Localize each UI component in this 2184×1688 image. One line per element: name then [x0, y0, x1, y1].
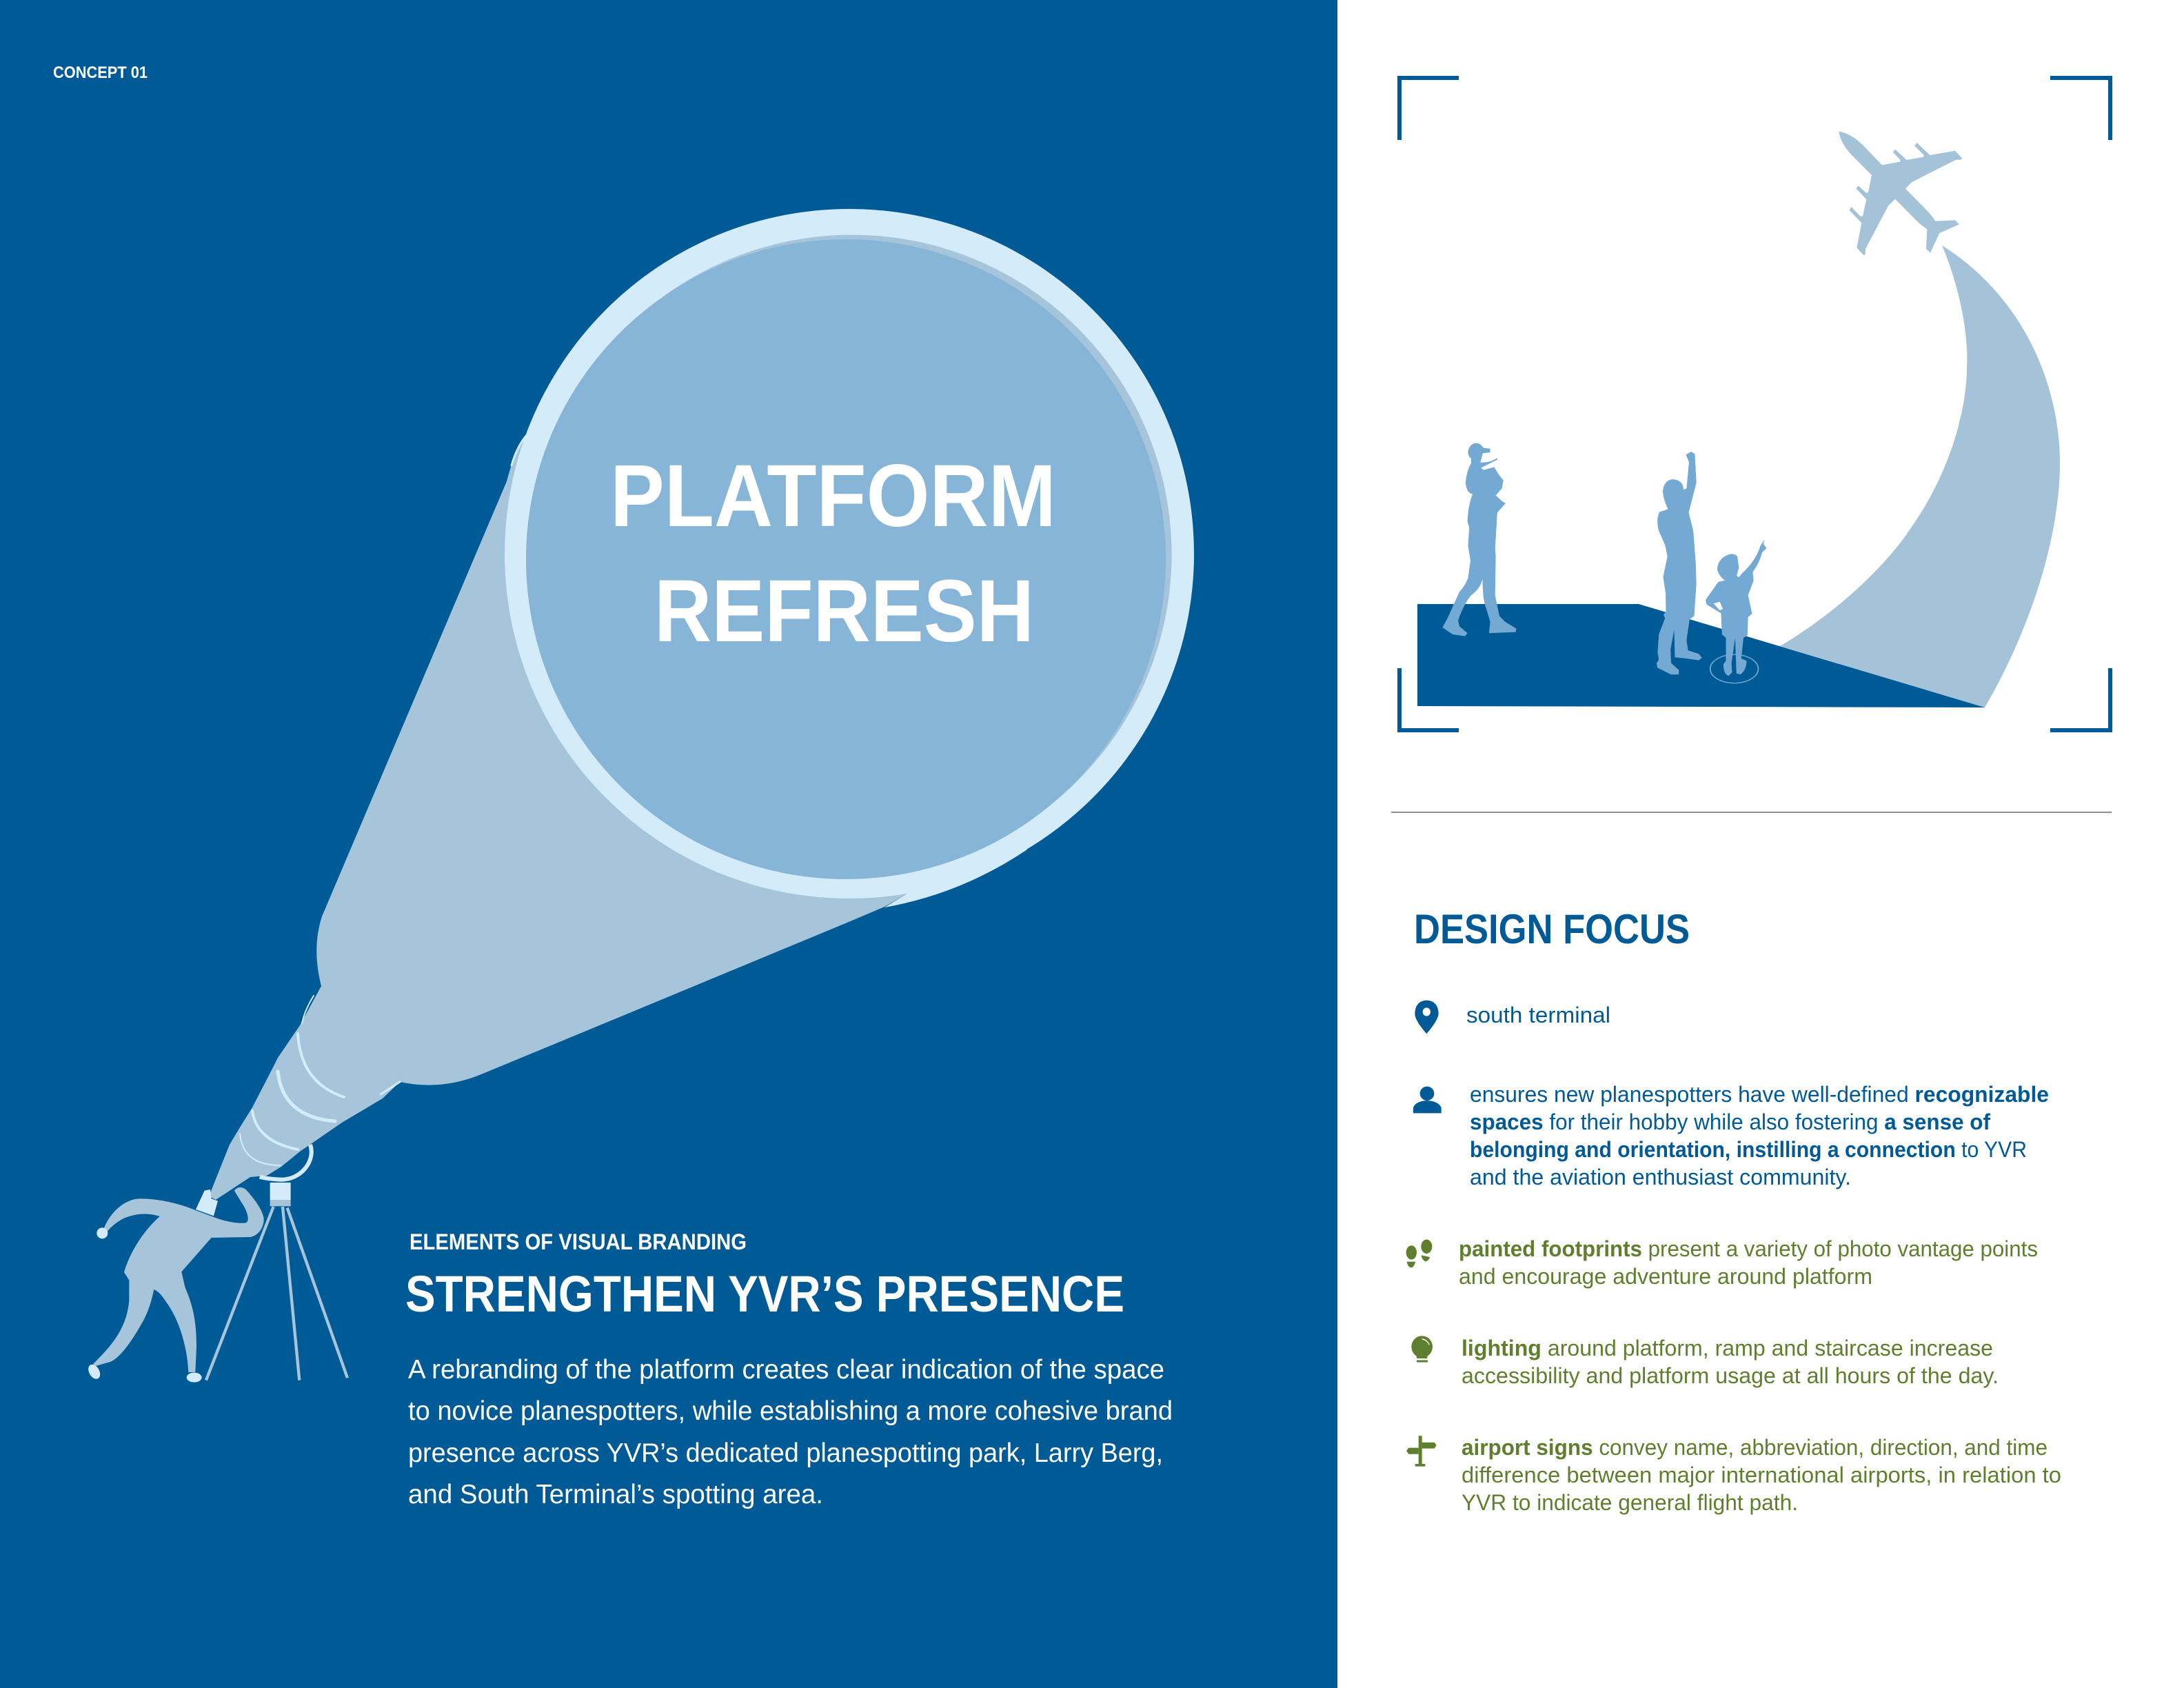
- heading: design focus: DESIGN FOCUS: [1414, 906, 1690, 952]
- text block: airport signs: YVR to indicate general flight path.: [1462, 1490, 1798, 1515]
- icons: design focus list: [1406, 1001, 1442, 1467]
- text block: new planespotters: spaces for their hobby while also fostering a sense of: [1470, 1109, 1990, 1134]
- icon: footprints: [1406, 1240, 1432, 1267]
- eyepiece: [196, 1189, 218, 1216]
- text block: airport signs: [1462, 1435, 2061, 1515]
- text block: painted footprints: and encourage adventure around platform: [1459, 1264, 1872, 1289]
- text block: new planespotters: belonging and orientation, instilling a connection to YVR: [1470, 1137, 2027, 1162]
- person body: [93, 1187, 264, 1372]
- text block: new planespotters: [1470, 1082, 2049, 1189]
- telescope ring highlights: [240, 430, 532, 1165]
- illustration: telescope with beam and lens: [209, 209, 1194, 1200]
- viewfinder corner brackets: [1399, 78, 2110, 730]
- child pointing up: [1706, 539, 1766, 676]
- text block: painted footprints: [1459, 1236, 2038, 1289]
- text block: strengthen YVR's presence: to novice planespotters, while establishing a more cohesive brand: [408, 1396, 1173, 1426]
- icon: person: [1413, 1087, 1442, 1113]
- footprint circle marker: [1710, 654, 1758, 683]
- text block: strengthen YVR's presence: A rebranding of the platform creates clear indication of the space: [408, 1355, 1164, 1385]
- tripod head: [270, 1183, 291, 1206]
- text block: airport signs: airport signs convey name, abbreviation, direction, and time: [1462, 1435, 2048, 1460]
- text: south terminal: south terminal: [1466, 1003, 1610, 1027]
- text block: strengthen YVR's presence: [405, 1229, 1173, 1509]
- text block: lighting: [1462, 1336, 1999, 1388]
- text block: strengthen YVR's presence: presence across YVR’s dedicated planespotting park, Larry Berg,: [408, 1438, 1163, 1468]
- icon: airplane: [1839, 132, 1962, 255]
- icon: signpost: [1406, 1436, 1437, 1467]
- text block: lighting: lighting around platform, ramp and staircase increase: [1462, 1336, 1993, 1360]
- text block: new planespotters: and the aviation enthusiast community.: [1470, 1165, 1851, 1189]
- icon: light bulb: [1411, 1336, 1433, 1363]
- label: concept number: CONCEPT 01: [53, 63, 148, 82]
- text block: lighting: accessibility and platform usage at all hours of the day.: [1462, 1363, 1999, 1388]
- panel: left blue background: [0, 0, 1337, 1688]
- illustration: people watching planes: [1442, 443, 1766, 683]
- telescope body and beam: [209, 430, 906, 1200]
- title: platform refresh: REFRESH: [654, 562, 1034, 661]
- adult pointing up: [1657, 452, 1702, 674]
- tripod legs: [206, 1207, 347, 1380]
- text block: painted footprints: painted footprints present a variety of photo vantage points: [1459, 1236, 2038, 1261]
- illustration: platform: [1417, 604, 1985, 707]
- lens lower rim wedge: [884, 827, 1027, 907]
- lens rings: [505, 209, 1194, 898]
- illustration: curved flight trail: [1780, 245, 2060, 707]
- text block: strengthen YVR's presence: ELEMENTS OF VISUAL BRANDING: [410, 1229, 747, 1254]
- text block: strengthen YVR's presence: and South Terminal’s spotting area.: [408, 1480, 823, 1509]
- tripod mount ring: [260, 1145, 312, 1180]
- illustration: person and tripod: [86, 1145, 347, 1383]
- text block: airport signs: difference between major international airports, in relation to: [1462, 1463, 2061, 1487]
- hand and feet: [86, 1227, 202, 1383]
- text block: new planespotters: ensures new planespotters have well-defined recognizable: [1470, 1082, 2049, 1107]
- title: platform refresh: PLATFORM: [610, 447, 1056, 545]
- adult carrying child on shoulders: [1442, 443, 1517, 636]
- text block: strengthen YVR's presence: STRENGTHEN YVR’S PRESENCE: [405, 1265, 1124, 1323]
- title: platform refresh: [610, 447, 1056, 661]
- icon: location pin: [1415, 1001, 1439, 1034]
